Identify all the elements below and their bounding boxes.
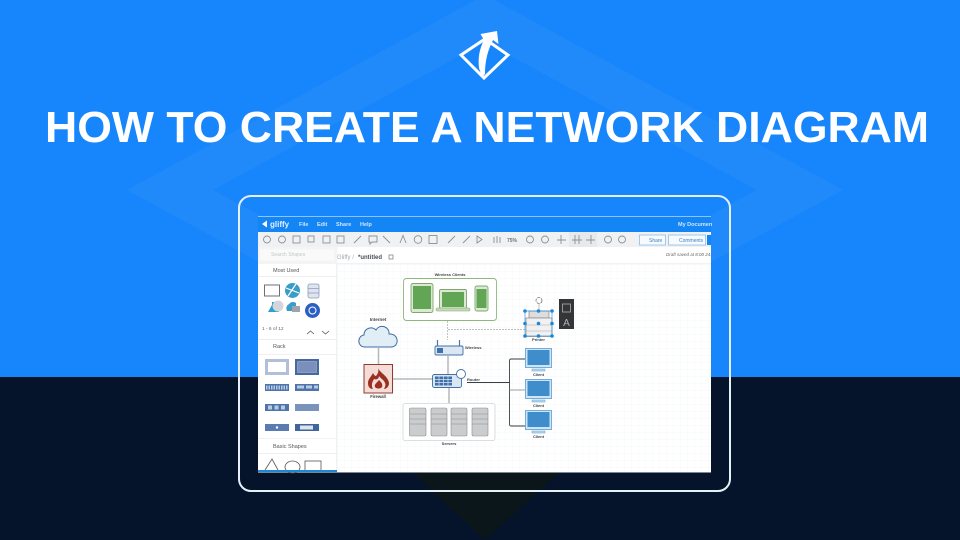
wireless router xyxy=(435,340,482,355)
app top bar: My Documen xyxy=(678,222,713,228)
servers group: Servers xyxy=(442,441,457,446)
toolbar: Share xyxy=(649,238,663,244)
document header: *untitled xyxy=(358,255,382,261)
shape sidebar: Search Shapes xyxy=(271,252,306,258)
document header xyxy=(337,252,714,264)
dark lower band xyxy=(0,377,960,540)
logo xyxy=(461,31,508,78)
blue background with diamond band xyxy=(0,0,960,385)
servers group xyxy=(403,404,495,446)
wireless clients group: Wireless Clients xyxy=(435,272,466,277)
document header: Gliffy / xyxy=(337,255,354,261)
app top bar: Help xyxy=(360,222,373,228)
app top bar: File xyxy=(299,222,308,228)
device frame xyxy=(239,196,730,491)
toolbar: Comments xyxy=(679,238,704,244)
firewall: Firewall xyxy=(370,394,386,399)
app top bar: Edit xyxy=(317,222,328,228)
app window xyxy=(258,216,714,473)
app top bar xyxy=(258,216,713,232)
desktop monitors: Client xyxy=(533,372,545,377)
desktop monitors xyxy=(526,348,552,439)
title: HOW TO CREATE A NETWORK DIAGRAM xyxy=(45,103,929,152)
diagram canvas grid xyxy=(337,264,711,472)
connector lines xyxy=(378,321,525,426)
shape sidebar: Rack xyxy=(273,344,286,350)
desktop monitors: Client xyxy=(533,403,545,408)
selected printer with handles: Printer xyxy=(532,337,545,342)
shape sidebar xyxy=(258,247,337,473)
wireless clients group xyxy=(404,272,496,320)
document header: Draft saved at 8:00 24... xyxy=(666,252,714,257)
app top bar: Share xyxy=(336,222,351,228)
selected printer with handles xyxy=(523,298,554,342)
shape sidebar: Most Used xyxy=(273,268,299,274)
wireless router: Wireless xyxy=(465,345,482,350)
dark shape popup: A xyxy=(563,318,570,329)
app top bar: gliffy xyxy=(270,220,290,229)
firewall xyxy=(364,364,392,399)
dark shape popup xyxy=(559,299,574,329)
toolbar xyxy=(258,232,711,247)
desktop monitors: Client xyxy=(533,434,545,439)
shape sidebar: Basic Shapes xyxy=(273,444,307,450)
shape sidebar: 1 - 6 of 12 xyxy=(262,326,284,332)
internet cloud xyxy=(359,317,397,347)
toolbar: 75% xyxy=(507,238,518,244)
router xyxy=(432,370,480,388)
router: Router xyxy=(467,377,480,382)
internet cloud: Internet xyxy=(370,317,387,322)
